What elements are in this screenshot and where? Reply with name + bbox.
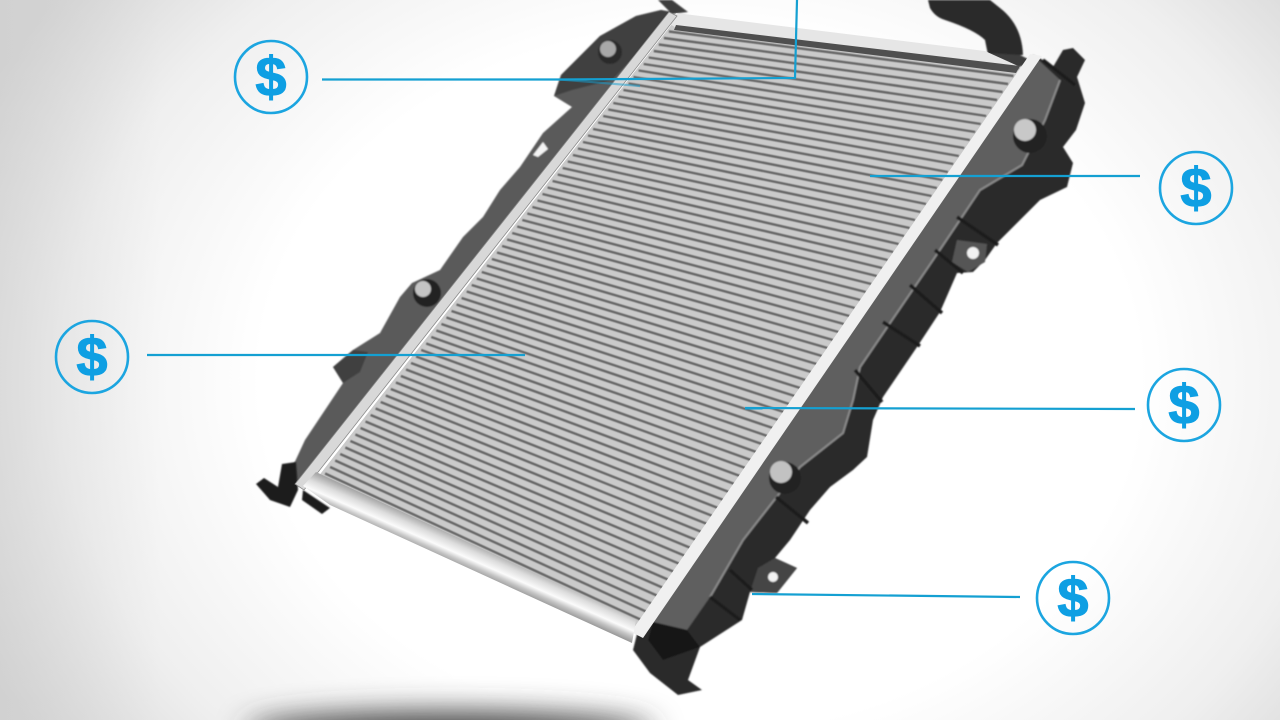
gray inner band of right tank [636,55,1060,634]
callout: top left: $ [255,45,287,108]
callout: lower right: $ [1057,566,1089,629]
floor shadow [245,712,655,720]
right plastic tank [633,48,1085,695]
callout: upper right [870,152,1232,224]
top rail [670,13,1020,73]
callout: upper right: $ [1180,156,1212,219]
radiator core fins [314,24,1024,630]
callout: middle right: $ [1168,373,1200,436]
bottom bar [303,472,636,643]
right rail [631,54,1042,638]
callout: lower right [752,562,1109,634]
radiator hose [928,0,1034,70]
callout: middle left: $ [76,325,108,388]
bottom left pegs [256,462,330,514]
callout: middle left [56,321,525,393]
left rail [295,12,677,490]
callout: top left [235,0,797,113]
callout: middle right [745,369,1220,441]
left plastic tank [292,0,688,486]
radiator [256,0,1085,695]
